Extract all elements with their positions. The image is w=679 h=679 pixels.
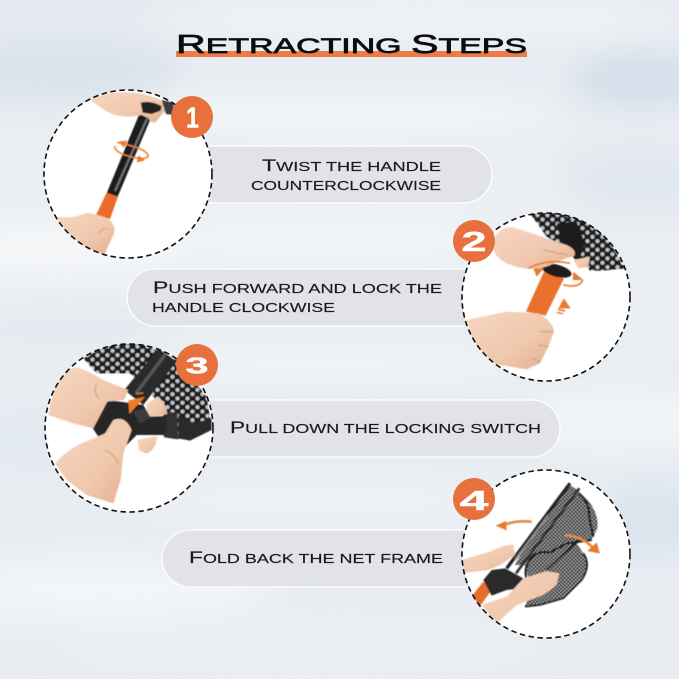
badge: step 3: 3 <box>186 352 208 378</box>
step 4 caption text: F OLD BACK THE NET FRAME <box>189 549 443 567</box>
step 1 caption text: COUNTERCLOCKWISE <box>251 178 441 193</box>
badge: step 2: 2 <box>462 226 486 257</box>
dashed outline <box>44 90 212 258</box>
panel: step 3 photo circle <box>45 344 213 512</box>
dashed outline <box>462 213 630 381</box>
badge: step 2 <box>453 220 495 262</box>
step 2 caption text <box>152 279 442 315</box>
step 1 caption text <box>251 157 441 193</box>
step 3 caption text: P ULL DOWN THE LOCKING SWITCH <box>230 419 541 437</box>
step 2 caption text: P USH FORWARD AND LOCK THE <box>153 279 442 297</box>
badge: step 1 <box>171 96 213 138</box>
step 2 caption pill <box>127 269 527 326</box>
title underline <box>176 51 527 57</box>
illustration: pulling locking switch <box>48 344 212 503</box>
badge: step 4 <box>453 478 495 520</box>
title <box>176 31 527 59</box>
step 3 caption pill <box>170 400 560 457</box>
dashed outline <box>45 344 213 512</box>
illustration: twisting handle <box>57 92 174 255</box>
badge: step 3 <box>176 344 218 386</box>
step 2 caption text: HANDLE CLOCKWISE <box>152 300 335 315</box>
badge: step 4: 4 <box>460 485 489 516</box>
step 4 caption pill <box>162 530 532 587</box>
panel: step 2 photo circle <box>462 212 630 381</box>
panel: step 1 photo circle <box>44 90 212 258</box>
panel: step 4 photo circle <box>462 470 630 638</box>
step 1 caption pill <box>150 146 492 203</box>
dashed outline <box>462 470 630 638</box>
badge: step 1: 1 <box>186 102 199 134</box>
illustration: folding net frame <box>462 483 600 623</box>
illustration: pushing and locking handle <box>467 212 625 369</box>
title text: R ETRACTING S TEPS <box>176 31 527 59</box>
step 1 caption text: T WIST THE HANDLE <box>262 157 441 175</box>
